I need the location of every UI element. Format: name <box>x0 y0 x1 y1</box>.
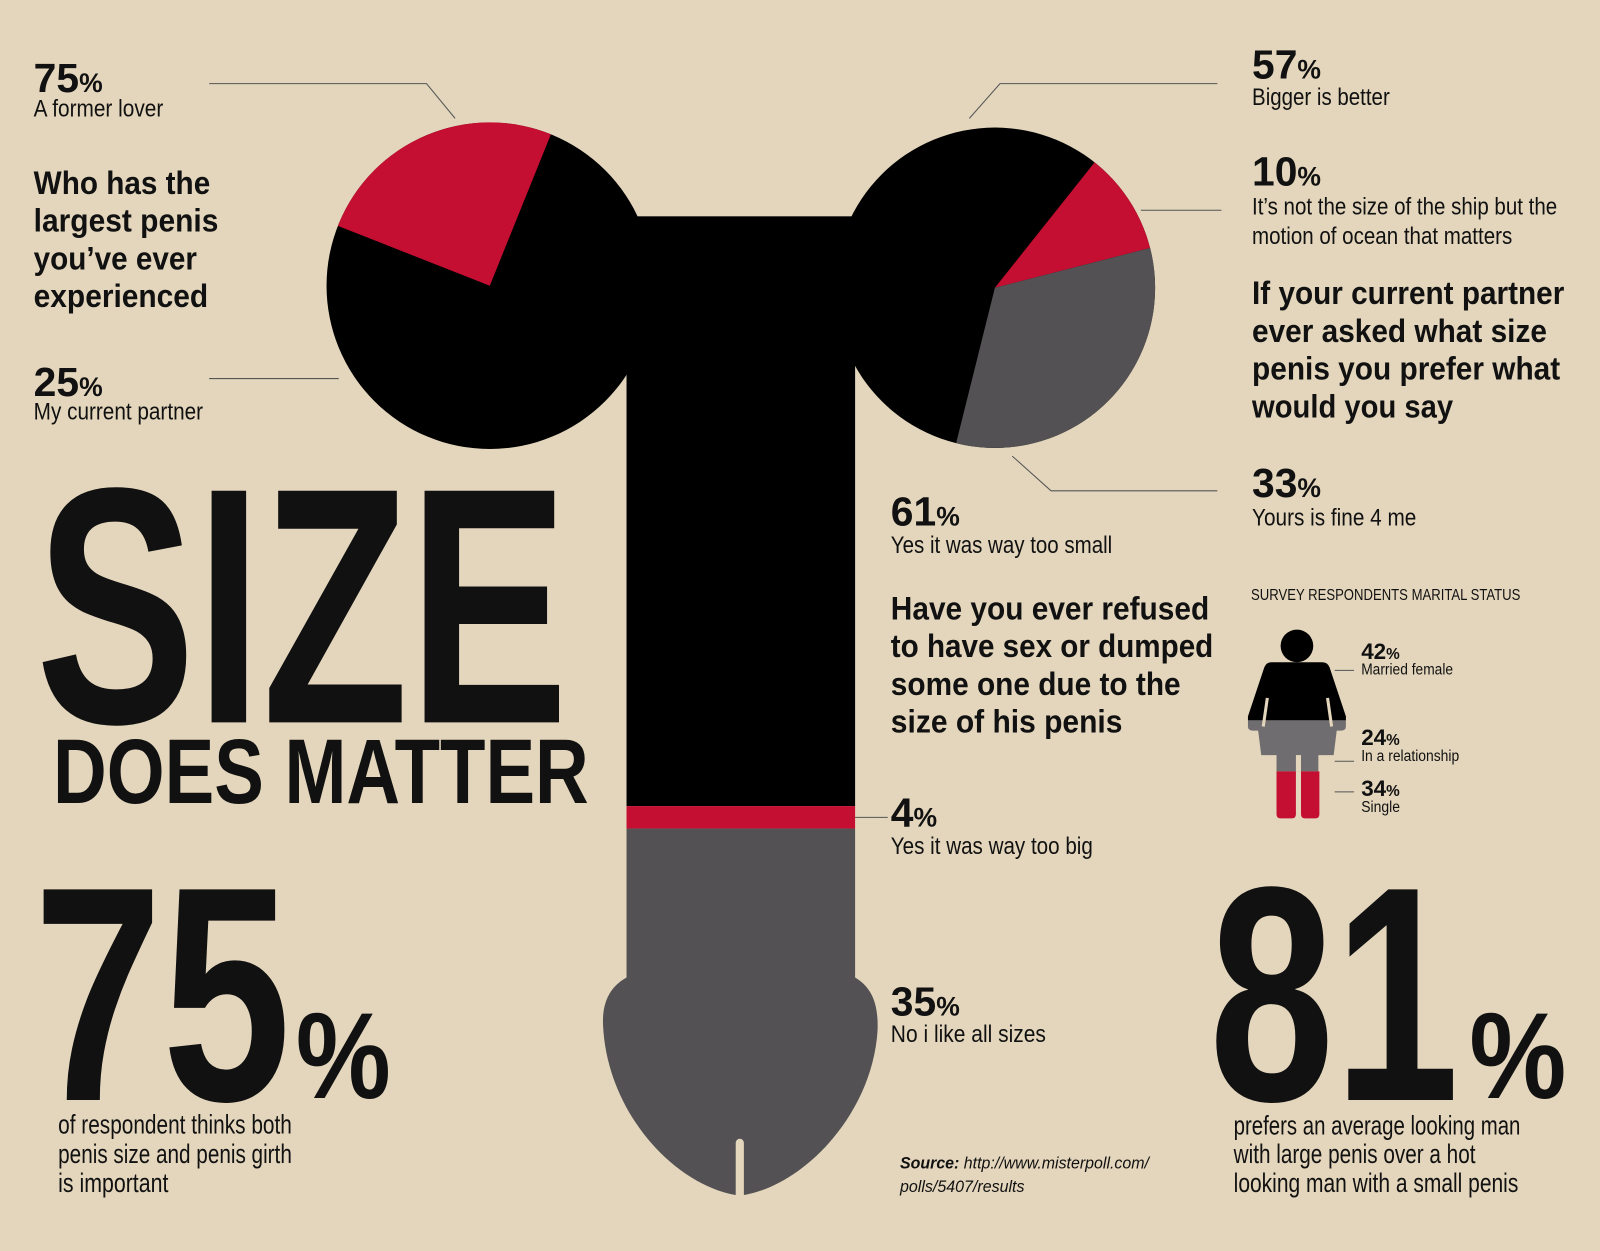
big stat: 75%: of respondent thinks both <box>58 1110 292 1140</box>
marital stats labels: Married female <box>1361 661 1453 678</box>
stat: 33% yours is fine: Yours is fine 4 me <box>1252 505 1416 532</box>
source note: Source: http://www.misterpoll.com/ <box>900 1154 1150 1172</box>
stat: 57% bigger is better: Bigger is better <box>1252 84 1390 111</box>
stat: 61% too small <box>891 489 1112 559</box>
marital stats labels: 34% <box>1361 776 1400 801</box>
stat: 4% too big <box>891 790 1093 860</box>
heading: largest penis question: Who has the <box>34 164 210 201</box>
marital stats labels: 24% <box>1361 725 1400 750</box>
big stat: 81%: looking man with a small penis <box>1234 1168 1518 1198</box>
heading: partner preference question <box>1251 274 1565 424</box>
marital status heading: SURVEY RESPONDENTS MARITAL STATUS <box>1251 587 1520 604</box>
source note <box>899 1154 1150 1196</box>
title: SIZE DOES MATTER: SIZE <box>36 418 568 794</box>
stat: 25% current partner: My current partner <box>34 398 203 425</box>
title: SIZE DOES MATTER: DOES MATTER <box>53 721 589 823</box>
stat: 10% motion of ocean: motion of ocean that matters <box>1252 223 1512 250</box>
heading: refused sex question: to have sex or dumped <box>891 627 1213 664</box>
stat: 4% too big: Yes it was way too big <box>891 833 1093 860</box>
stat: 75% former lover <box>34 55 163 122</box>
big stat: 81%: % <box>1469 987 1566 1124</box>
heading: refused sex question: some one due to the <box>891 665 1181 702</box>
big stat: 75%: % <box>296 987 391 1124</box>
heading: refused sex question: size of his penis <box>891 703 1122 740</box>
heading: refused sex question: Have you ever refused <box>891 589 1209 626</box>
stat: 10% motion of ocean: 10% <box>1252 149 1321 195</box>
title: SIZE DOES MATTER <box>36 418 589 823</box>
big stat: 81%: prefers an average looking man <box>1234 1111 1520 1141</box>
leader lines <box>209 84 1354 817</box>
stat: 4% too big: 4% <box>891 790 937 836</box>
source note: polls/5407/results <box>899 1178 1024 1196</box>
marital stats labels <box>1361 639 1459 816</box>
stat: 25% current partner: 25% <box>34 359 103 405</box>
pie: left testicle <box>327 122 653 449</box>
stat: 61% too small: Yes it was way too small <box>891 532 1112 559</box>
stat: 35% all sizes: 35% <box>891 978 960 1024</box>
pie: right testicle <box>835 128 1155 448</box>
icon: woman figure <box>1248 630 1346 818</box>
heading: largest penis question: largest penis <box>34 202 218 239</box>
stat: 33% yours is fine: 33% <box>1252 460 1321 506</box>
heading: partner preference question: would you say <box>1251 387 1453 424</box>
shaft: black body <box>627 216 855 806</box>
red band 4% <box>627 806 855 829</box>
marital stats labels: 42% <box>1361 639 1400 664</box>
stat: 61% too small: 61% <box>891 489 960 535</box>
stat: 33% yours is fine <box>1252 460 1416 532</box>
stat: 35% all sizes: No i like all sizes <box>891 1021 1046 1048</box>
big stat: 81%: 81 <box>1209 823 1459 1165</box>
stat: 35% all sizes <box>891 978 1046 1048</box>
stat: 75% former lover: 75% <box>34 55 103 101</box>
stat: 75% former lover: A former lover <box>34 95 163 122</box>
heading: largest penis question: you’ve ever <box>34 239 197 276</box>
heading: partner preference question: ever asked what size <box>1252 312 1547 349</box>
heading: largest penis question: experienced <box>34 277 208 314</box>
heading: partner preference question: penis you prefer what <box>1252 350 1560 387</box>
marital stats labels: Single <box>1361 799 1400 816</box>
marital stats labels: In a relationship <box>1361 748 1459 765</box>
stat: 57% bigger is better: 57% <box>1252 42 1321 88</box>
heading: refused sex question <box>891 589 1213 740</box>
big stat: 81%: with large penis over a hot <box>1233 1139 1476 1169</box>
stat: 25% current partner <box>34 359 203 425</box>
stat: 57% bigger is better <box>1252 42 1390 111</box>
big stat: 75%: is important <box>58 1168 169 1198</box>
stat: 10% motion of ocean <box>1252 149 1557 250</box>
big stat: 75%: 75 <box>34 823 291 1165</box>
heading: largest penis question <box>34 164 218 314</box>
glans gray 35% <box>603 829 878 1200</box>
heading: partner preference question: If your current partner <box>1252 274 1565 311</box>
big stat: 75%: penis size and penis girth <box>58 1139 292 1169</box>
